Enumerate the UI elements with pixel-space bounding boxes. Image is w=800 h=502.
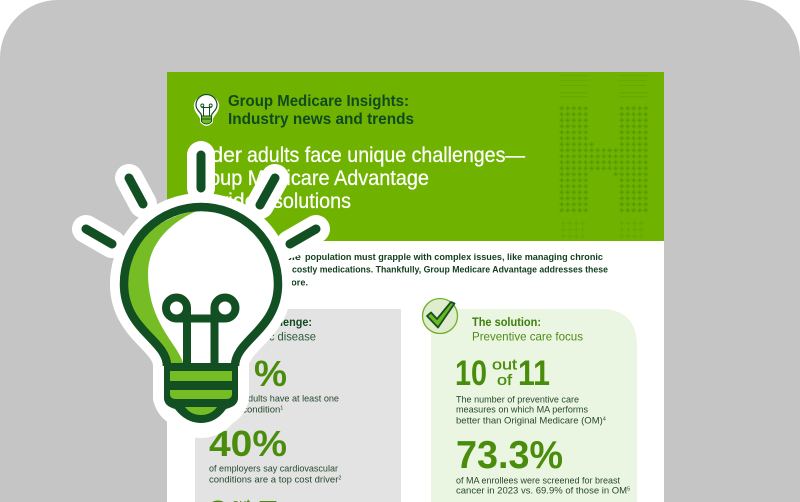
stat: 93 percent: 93 (209, 353, 247, 394)
text: screening: 5 (627, 486, 630, 492)
stat: 40 percent: 2 (338, 476, 341, 482)
stat: 40 percent (209, 423, 341, 486)
text block: intro: more. (283, 278, 308, 288)
text block: intro: This Medicare-eligible (187, 252, 301, 263)
text: screening: of MA enrollees were screened for breast (456, 476, 620, 486)
stat: 93 percent: 1 (280, 406, 283, 412)
stat: 40 percent: of employers say cardiovascular (209, 464, 338, 474)
text: preventive measures: measures on which MA performs (456, 404, 588, 416)
white halo (86, 155, 316, 424)
heading: solution: The solution: (472, 315, 541, 329)
stat: 93 percent: adults have at least one (243, 394, 339, 404)
heading: main title: solutions (273, 190, 351, 213)
heading: challenge: Chronic disease (236, 330, 316, 344)
document page (167, 72, 664, 502)
heading: main title (187, 144, 525, 213)
heading: solution (472, 315, 583, 344)
heading: main title: Older (190, 144, 242, 167)
text: preventive measures: better than Original Medicare (OM) (456, 416, 603, 426)
text: preventive measures: The number of preventive care (456, 394, 579, 406)
text: screening: cancer in 2023 vs. 69.9% of those in OM (456, 486, 627, 496)
panel: the challenge (195, 309, 401, 502)
rays (86, 155, 316, 244)
heading: main title: Group Medicare Advantage (187, 167, 429, 190)
heading: main title: provides (187, 190, 267, 213)
text: preventive measures: 4 (603, 416, 606, 422)
stat: 93 percent (209, 353, 339, 416)
stat: 73.3 percent: 73.3% (456, 434, 563, 477)
heading: series title: Group Medicare Insights: (228, 93, 409, 110)
icon: check mark (422, 298, 458, 334)
heading: challenge (236, 315, 316, 344)
stat: 10 out of 11 (455, 354, 550, 393)
text block: intro: population must grapple with complex issues, like managing chronic (305, 252, 603, 263)
stat: 10 out of 11: of (497, 372, 513, 389)
heading: solution: Preventive care focus (472, 330, 583, 344)
bulb glass outline (124, 207, 278, 366)
stat: 93 percent: of older (209, 394, 239, 404)
text: screening (456, 476, 630, 496)
stat: 10 out of 11: out (492, 356, 518, 374)
heading: series title (228, 93, 414, 128)
crescent shading (124, 211, 197, 366)
filament (166, 298, 236, 366)
icon: small lightbulb logo (195, 94, 218, 124)
stat: 93 percent: chronic condition (209, 404, 280, 416)
panel: green header (167, 72, 664, 241)
stat: 10 out of 11: 10 (455, 354, 487, 393)
heading: challenge: The challenge: (236, 315, 312, 329)
stat: 93 percent: % (254, 353, 287, 394)
text block: intro: issues and (187, 278, 277, 288)
heading: main title: adults face unique challenges— (247, 144, 525, 167)
stat: 3 out of 7 (208, 492, 278, 502)
text block: intro (187, 252, 608, 288)
decorative H dot pattern (559, 75, 649, 240)
text: preventive measures (456, 394, 606, 426)
heading: series title: Industry news and trends (228, 111, 414, 128)
screw base (164, 363, 238, 423)
stat: 40 percent: 40% (209, 423, 287, 464)
text block: intro: costly medications. Thankfully, Group Medicare Advantage addresses these (292, 264, 608, 276)
icon: large lightbulb (86, 155, 316, 424)
text block: intro: conditions and (187, 264, 287, 276)
stat: 40 percent: conditions are a top cost driver (209, 474, 338, 486)
panel: the solution (422, 298, 637, 502)
stat: 10 out of 11: 11 (518, 354, 550, 393)
